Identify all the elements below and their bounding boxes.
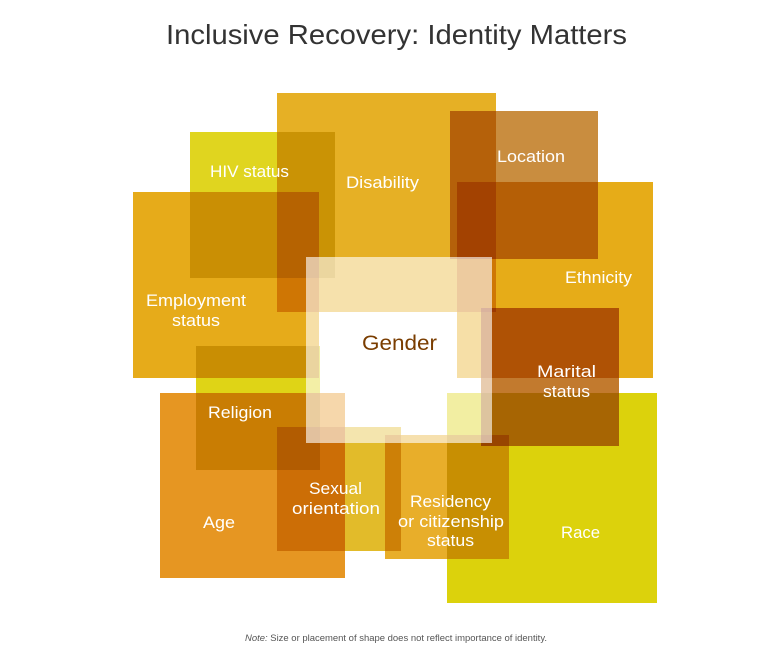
title: Inclusive Recovery: Identity Matters (166, 19, 627, 50)
label: employment status (146, 291, 246, 330)
square: marital status (481, 308, 619, 446)
square: race (447, 393, 657, 603)
square: disability (277, 93, 496, 312)
label: residency or citizenship status (398, 492, 504, 550)
label: sexual orientation: Sexual (309, 479, 362, 498)
square: gender (translucent white) (306, 257, 492, 443)
square: sexual orientation (277, 427, 401, 551)
square: religion (196, 346, 320, 470)
label: location: Location (497, 147, 565, 166)
label: HIV status: HIV status (210, 162, 289, 181)
label: residency or citizenship status: Residency (410, 492, 492, 511)
square: age (160, 393, 345, 578)
label: age: Age (203, 513, 235, 532)
square: location (450, 111, 598, 259)
label: employment status: Employment (146, 291, 246, 310)
label: marital status: Marital (537, 362, 596, 381)
overlapping identity squares (133, 93, 657, 603)
label: disability: Disability (346, 173, 420, 192)
label: gender: Gender (362, 332, 437, 355)
square: employment status (133, 192, 319, 378)
label: marital status (537, 362, 596, 401)
label: sexual orientation: orientation (292, 499, 380, 518)
label: residency or citizenship status: status (427, 531, 474, 550)
square: residency or citizenship status (385, 435, 509, 559)
square: HIV status (190, 132, 335, 278)
label: residency or citizenship status: or citizenship (398, 512, 504, 531)
footnote: Note: Size or placement of shape does not reflect importance of identity. (245, 633, 547, 643)
label: ethnicity: Ethnicity (565, 268, 633, 287)
label: race: Race (561, 523, 600, 542)
label: marital status: status (543, 382, 590, 401)
label: sexual orientation (292, 479, 380, 518)
label: religion: Religion (208, 403, 272, 422)
label: employment status: status (172, 311, 220, 330)
square: ethnicity (457, 182, 653, 378)
